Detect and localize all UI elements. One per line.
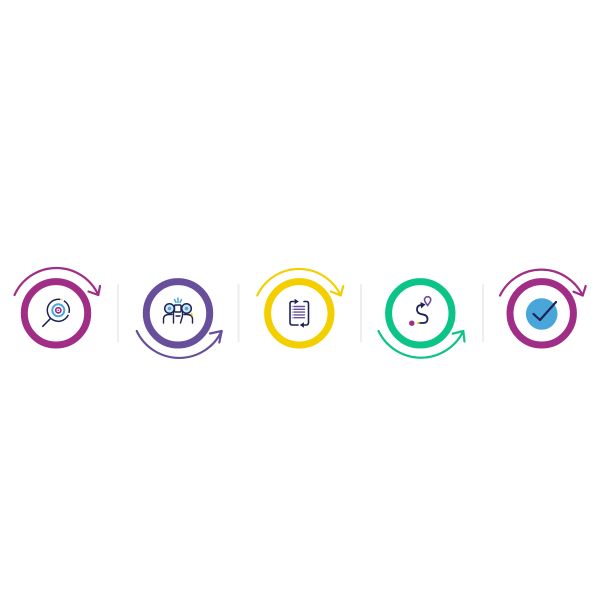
- step 2: two people with binoculars: [137, 282, 222, 358]
- arrow: clockwise over top: [500, 270, 586, 296]
- icon: magnifier with target: [43, 295, 73, 326]
- ring: yellow: [268, 282, 331, 345]
- arrow: clockwise over top: [257, 269, 343, 296]
- ring: magenta: [24, 282, 88, 345]
- step 1: research target: [14, 268, 100, 345]
- icon: blue disc with check: [526, 298, 558, 330]
- step 3: document with cycle arrows: [257, 269, 343, 345]
- step 5: checkmark complete: [500, 270, 586, 345]
- ring: purple: [146, 282, 210, 345]
- ring: green: [389, 282, 452, 345]
- step 4: route with pin: [378, 282, 464, 358]
- ring: magenta: [510, 282, 573, 345]
- arrow: clockwise under bottom: [378, 331, 464, 358]
- icon: checklist document: [290, 300, 308, 327]
- icon: route path: [409, 297, 431, 326]
- icon: people with binoculars: [164, 298, 192, 323]
- arrow: clockwise over top: [14, 268, 100, 295]
- arrow: clockwise under bottom: [137, 331, 222, 358]
